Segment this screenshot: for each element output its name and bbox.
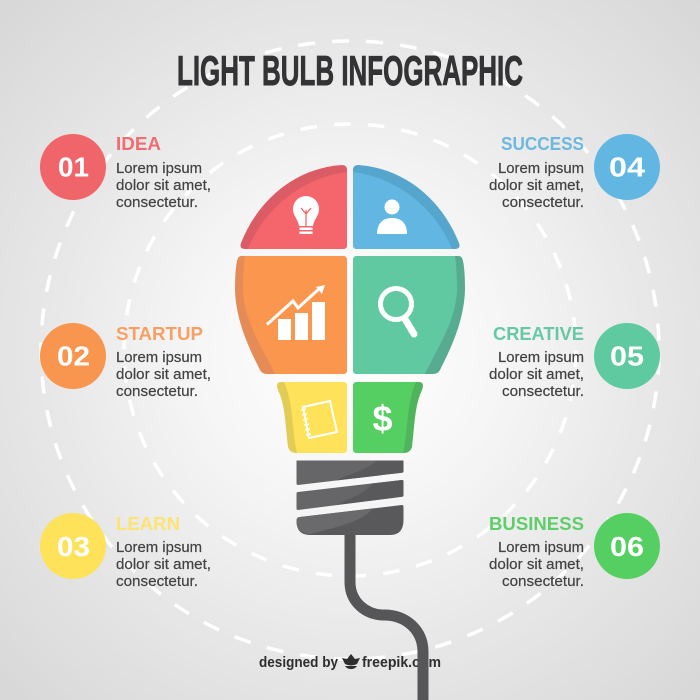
item 01: idea: dolor sit amet,	[116, 177, 211, 194]
item 03: learn: dolor sit amet,	[116, 556, 211, 573]
icon: person	[377, 200, 407, 234]
item 05: creative: Lorem ipsum	[498, 349, 584, 366]
item 05: creative: 05	[610, 340, 644, 372]
segment: teal middle right	[353, 256, 465, 374]
icon: freepik crown	[342, 654, 360, 669]
item 01: idea: consectetur.	[116, 194, 198, 211]
item 02: startup: consectetur.	[116, 383, 198, 400]
item 06: business: Lorem ipsum	[498, 539, 584, 556]
item 05: creative: dolor sit amet,	[489, 366, 584, 383]
item 02: startup	[40, 323, 211, 400]
item 05: creative: CREATIVE	[493, 324, 584, 344]
item 04: success: SUCCESS	[501, 134, 584, 154]
item 02: startup: STARTUP	[116, 324, 203, 344]
icon: light bulb	[293, 196, 319, 234]
icon: notebook	[301, 401, 337, 438]
item 04: success: 04	[609, 152, 645, 182]
item 03: learn: LEARN	[116, 514, 180, 534]
credit: designed by freepik.com: designed by	[259, 655, 338, 671]
credit: designed by freepik.com	[259, 654, 441, 671]
segment: red top left	[240, 165, 347, 249]
icon: growth chart	[267, 285, 325, 340]
item 05: creative: consectetur.	[502, 383, 584, 400]
item 01: idea	[40, 134, 211, 211]
power cord	[350, 535, 423, 700]
item 03: learn: consectetur.	[116, 573, 198, 590]
item 03: learn: Lorem ipsum	[116, 539, 202, 556]
credit: designed by freepik.com: freepik.com	[362, 655, 441, 671]
item 04: success: consectetur.	[502, 194, 584, 211]
item 06: business	[489, 513, 660, 590]
item 06: business: dolor sit amet,	[489, 556, 584, 573]
segment: yellow lower left	[277, 382, 347, 453]
segment: blue top right	[353, 165, 460, 249]
icon: magnifying glass	[380, 288, 414, 334]
item 04: success: dolor sit amet,	[489, 177, 584, 194]
item 01: idea: 01	[58, 152, 89, 182]
item 01: idea: IDEA	[116, 134, 161, 154]
item 04: success: Lorem ipsum	[498, 160, 584, 177]
item 01: idea: Lorem ipsum	[116, 160, 202, 177]
item 02: startup: Lorem ipsum	[116, 349, 202, 366]
segment: orange middle left	[235, 256, 347, 374]
item 06: business: 06	[610, 531, 644, 562]
item 04: success	[489, 134, 660, 211]
item 06: business: BUSINESS	[489, 514, 584, 534]
item 03: learn: 03	[57, 531, 90, 562]
bulb screw base	[296, 460, 404, 535]
light bulb	[235, 165, 465, 453]
item 05: creative	[489, 323, 660, 400]
icon: dollar sign: $	[372, 398, 393, 439]
segment: green lower right	[353, 382, 423, 453]
item 02: startup: 02	[57, 340, 90, 372]
item 03: learn	[40, 513, 211, 590]
item 06: business: consectetur.	[502, 573, 584, 590]
item 02: startup: dolor sit amet,	[116, 366, 211, 383]
